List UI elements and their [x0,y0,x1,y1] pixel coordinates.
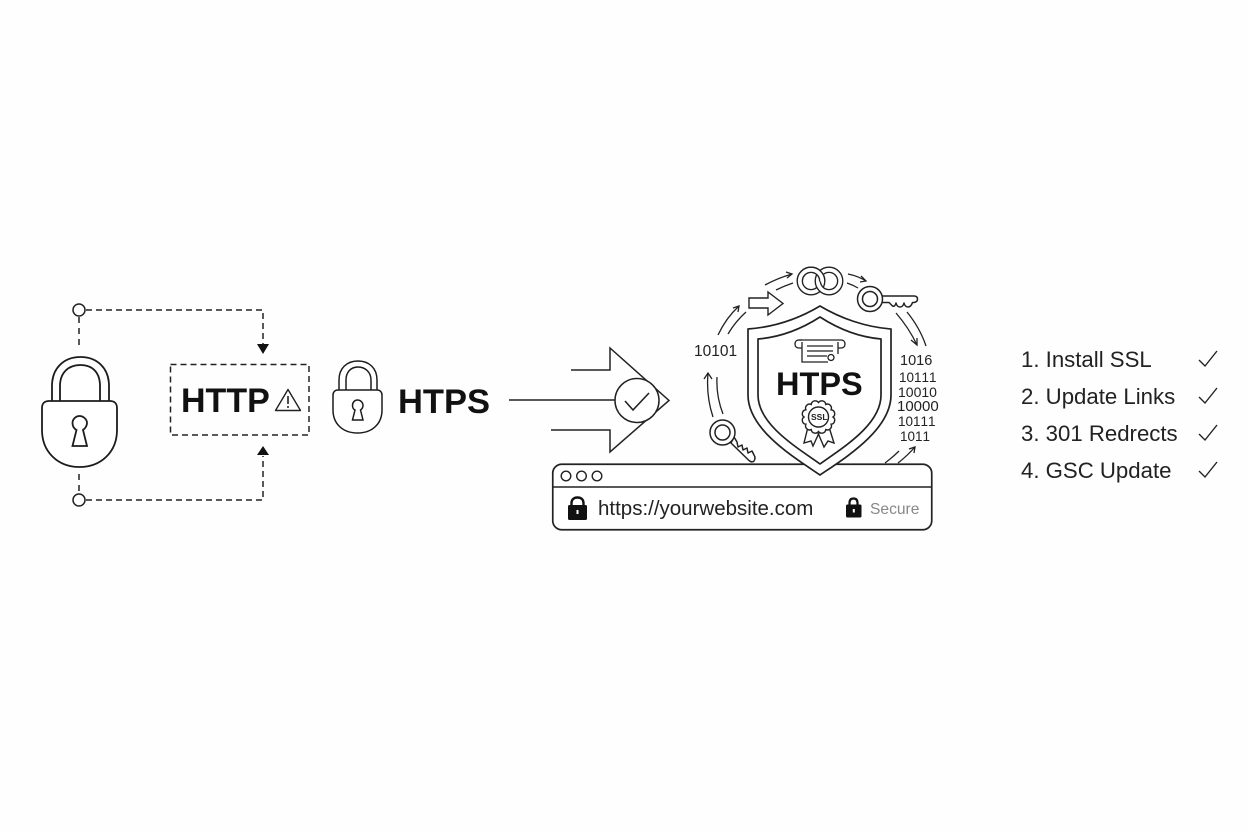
binary column right: 1016 [900,353,932,369]
binary column right: 10111 [899,370,937,385]
icon: warning triangle [276,390,300,410]
HTTP dashed box [170,364,309,435]
browser address bar: https://yourwebsite.com [598,497,813,520]
icon: interlocked links [800,270,840,292]
HTTP dashed box: HTTP [181,382,270,420]
icon: secure lock [846,498,862,518]
binary column right: 10000 [897,398,939,415]
browser window dots [561,471,602,481]
binary column right: 10111 [898,414,936,429]
browser address bar: Secure [870,501,919,518]
checklist item 4: 4. GSC Update [1021,458,1171,483]
icon: SSL seal with ribbons [802,401,835,447]
binary text left: 10101 [694,343,737,360]
HTPS shield label: HTPS [776,366,863,402]
connector: top dashed path to HTTP box [73,304,269,354]
infographic canvas [41,266,1218,531]
connector: bottom dashed path to HTTP box [73,446,269,506]
icon: black lock in address bar [568,498,587,520]
icon: large padlock [42,357,117,467]
checklist item 3: 3. 301 Redrects [1021,421,1178,446]
binary column right [897,353,939,444]
icon: certificate scroll [795,340,845,362]
HTPS label: HTPS [398,383,490,421]
binary column right: 10010 [898,384,937,400]
shield with certificate and SSL seal [748,306,891,475]
binary column right: 1011 [900,429,930,444]
cycle arcs and arrows around shield [704,272,926,463]
icon: SSL seal with ribbons: SSL [811,412,828,422]
icon: bottom-left key [710,420,755,462]
browser address bar [553,464,932,530]
checklist item 1 [1021,347,1217,372]
icon: check circle [615,378,659,422]
checklist item 1: 1. Install SSL [1021,347,1152,372]
icon: small padlock [333,361,382,433]
arrow: large outlined arrow with check badge [509,348,669,452]
icon: outlined right arrow [749,292,783,315]
checklist item 2: 2. Update Links [1021,384,1175,409]
icon: top-right key [858,286,918,312]
checklist [1021,347,1217,483]
